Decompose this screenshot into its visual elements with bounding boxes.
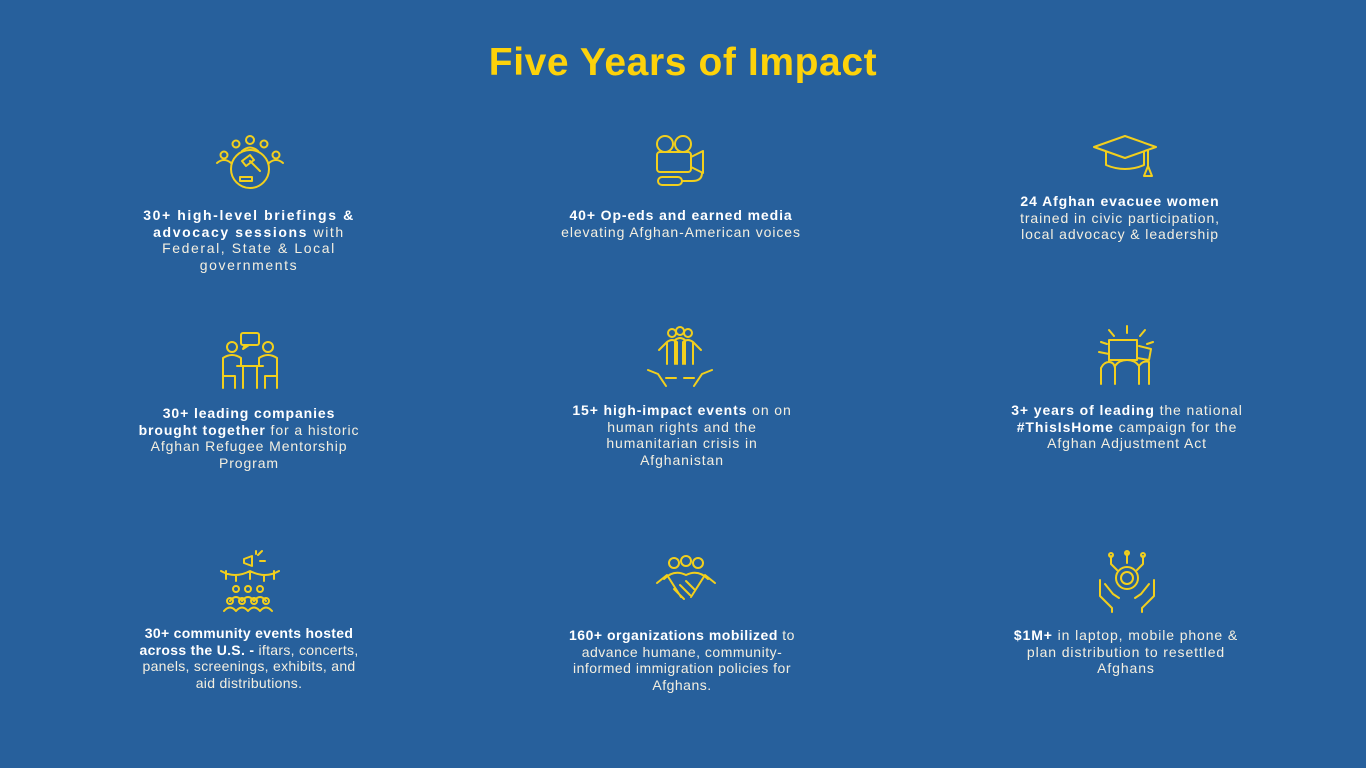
text: laptops: $1M+ in laptop, mobile phone &: [1014, 627, 1238, 643]
text: organizations: 160+ organizations mobilized to: [569, 627, 795, 643]
text: community events: [139, 625, 359, 691]
text: events: 15+ high-impact events on on: [572, 402, 792, 418]
icon: mentorship meeting: [222, 332, 278, 389]
text: campaign: Afghan Adjustment Act: [1047, 435, 1207, 451]
text: women: local advocacy & leadership: [1021, 226, 1219, 242]
text: op-eds: elevating Afghan-American voices: [561, 224, 801, 240]
text: community events: 30+ community events hosted: [145, 625, 353, 641]
text: community events: across the U.S. - iftars, concerts,: [139, 642, 359, 658]
text: op-eds: [561, 207, 801, 240]
text: briefings: Federal, State & Local: [162, 240, 336, 256]
text: events: human rights and the: [607, 419, 757, 435]
text: op-eds: 40+ Op-eds and earned media: [569, 207, 793, 223]
text: organizations: Afghans.: [652, 677, 712, 693]
text: briefings: 30+ high-level briefings &: [143, 207, 355, 223]
icon: camera microphone: [656, 135, 704, 186]
text: companies: Afghan Refugee Mentorship: [151, 438, 347, 454]
title: Five Years of Impact: [489, 41, 877, 84]
text: campaign: [1011, 402, 1243, 451]
text: women: 24 Afghan evacuee women: [1020, 193, 1220, 209]
icon: gavel and people: [216, 135, 284, 189]
text: briefings: [143, 207, 355, 273]
text: laptops: [1014, 627, 1238, 676]
text: events: humanitarian crisis in: [606, 435, 758, 451]
text: women: [1020, 193, 1220, 242]
text: community events: panels, screenings, exhibits, and: [142, 658, 356, 674]
icon: community event: [220, 550, 280, 612]
text: companies: brought together for a historic: [139, 422, 359, 438]
text: organizations: advance humane, community-: [582, 644, 782, 660]
text: campaign: 3+ years of leading the national: [1011, 402, 1243, 418]
text: companies: Program: [219, 455, 279, 471]
text: laptops: plan distribution to resettled: [1027, 644, 1225, 660]
text: briefings: governments: [200, 257, 298, 273]
text: events: Afghanistan: [640, 452, 724, 468]
text: laptops: Afghans: [1097, 660, 1155, 676]
text: organizations: [569, 627, 795, 693]
text: campaign: #ThisIsHome campaign for the: [1017, 419, 1237, 435]
text: events: [572, 402, 792, 468]
text: women: trained in civic participation,: [1020, 210, 1220, 226]
icon: handshake: [656, 555, 716, 600]
icon: hands and people: [647, 326, 713, 387]
text: companies: [139, 405, 359, 471]
text: organizations: informed immigration policies for: [573, 660, 791, 676]
icon: hands with gear: [1099, 550, 1155, 613]
text: briefings: advocacy sessions with: [153, 224, 345, 240]
text: community events: aid distributions.: [196, 675, 302, 691]
icon: graduation cap: [1093, 135, 1157, 177]
text: companies: 30+ leading companies: [163, 405, 335, 421]
icon: protest sign: [1098, 325, 1154, 385]
